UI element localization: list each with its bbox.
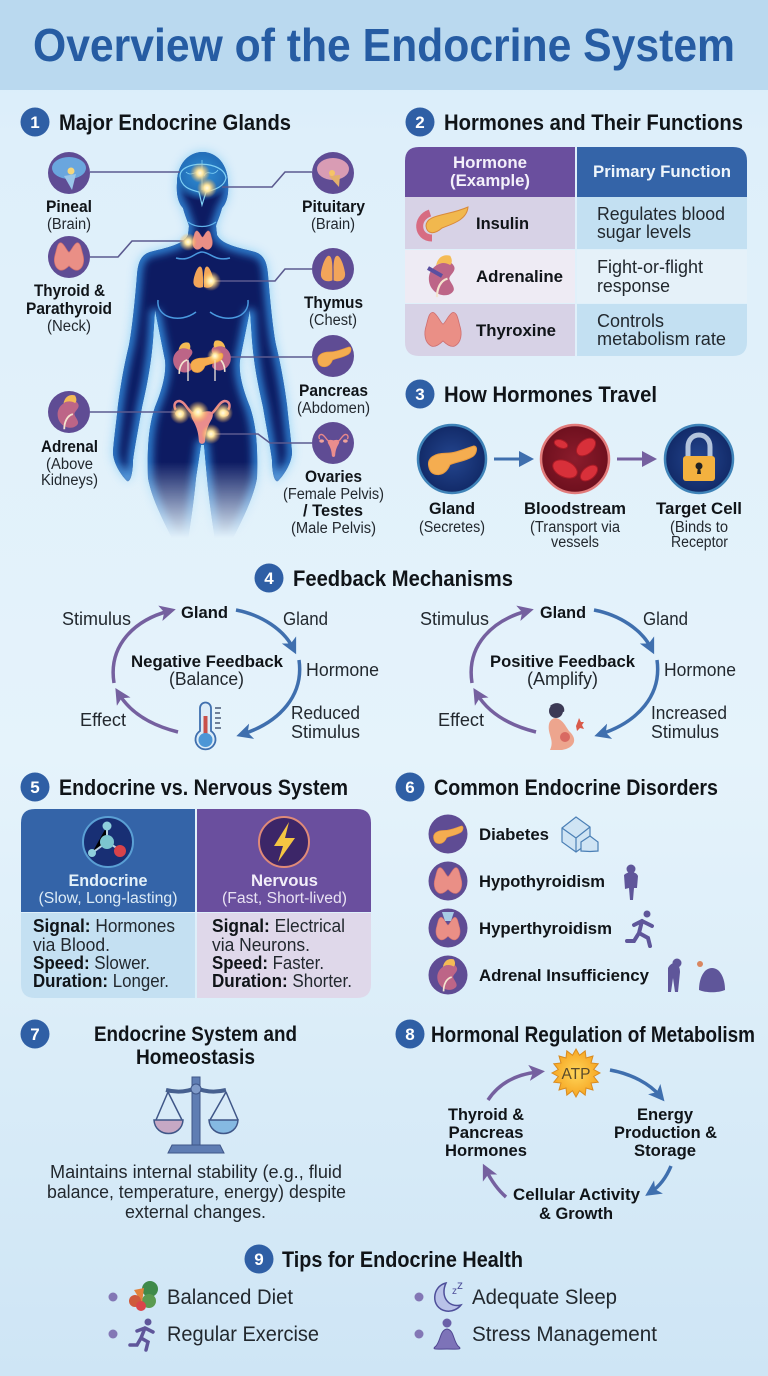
column: endocrine: Speed: Slower. [33, 953, 150, 973]
gland: pituitary: (Brain) [311, 216, 355, 233]
negative feedback loop: Gland [283, 609, 328, 629]
section heading 9: 9 [254, 1250, 264, 1269]
positive feedback loop [420, 604, 736, 750]
metabolism cycle: Hormones [445, 1142, 527, 1160]
gland: ovaries and testes: / Testes [303, 502, 363, 520]
icon: ATP burst: ATP [562, 1066, 590, 1083]
positive feedback loop: Gland [643, 609, 688, 629]
hormone table [405, 147, 747, 356]
section heading 4 [254, 564, 513, 592]
gland: adrenal: Adrenal [41, 438, 98, 456]
section heading 9: Tips for Endocrine Health [282, 1247, 523, 1272]
section heading 1 [20, 108, 291, 136]
tip: adequate sleep: z [457, 1278, 463, 1292]
icon: pregnant woman [549, 703, 584, 750]
tip: balanced diet: Balanced Diet [167, 1286, 293, 1309]
section heading 7: Homeostasis [136, 1046, 255, 1069]
gland: thyroid and parathyroid [26, 236, 112, 335]
section heading 4: 4 [264, 569, 274, 588]
metabolism cycle: Cellular Activity [513, 1186, 641, 1204]
section heading 4: Feedback Mechanisms [293, 566, 513, 591]
section heading 3 [406, 380, 657, 408]
hormone table: Primary Function [593, 163, 731, 181]
tip: stress management: Stress Management [472, 1323, 657, 1346]
panel: how hormones travel [406, 380, 742, 551]
section heading 7: Endocrine System and [94, 1023, 297, 1046]
gland: ovaries and testes: (Male Pelvis) [291, 520, 376, 537]
negative feedback loop: Hormone [306, 660, 379, 680]
column: endocrine: Signal: Hormones [33, 916, 175, 936]
step: bloodstream: (Transport via [530, 519, 620, 536]
metabolism cycle: Production & [614, 1124, 717, 1142]
positive feedback loop: Positive Feedback [490, 653, 636, 671]
disorder: adrenal insufficiency: Adrenal Insufficiency [479, 967, 650, 985]
disorder: hypothyroidism: Hypothyroidism [479, 873, 605, 891]
section heading 7 [20, 1020, 297, 1069]
title: Overview of the Endocrine System [33, 19, 735, 71]
positive feedback loop: Hormone [664, 660, 736, 680]
negative feedback loop: Reduced [291, 703, 360, 723]
column: nervous: Duration: Shorter. [212, 971, 352, 991]
gland: thyroid and parathyroid: Parathyroid [26, 300, 112, 318]
column: endocrine: Endocrine [68, 872, 148, 890]
row: insulin [420, 204, 725, 242]
tip: adequate sleep: z [452, 1286, 457, 1297]
section heading 6: 6 [405, 778, 415, 797]
gland: pineal [46, 152, 92, 233]
step: bloodstream: vessels [551, 534, 599, 551]
negative feedback loop [62, 604, 379, 749]
section heading 9 [244, 1244, 523, 1274]
tip: regular exercise: Regular Exercise [167, 1323, 319, 1346]
step: gland [418, 425, 486, 536]
gland: thymus: (Chest) [309, 312, 357, 329]
step: target cell: Receptor [671, 534, 728, 551]
column: nervous: via Neurons. [212, 935, 310, 955]
gland: pancreas: (Abdomen) [297, 400, 370, 417]
step: bloodstream: Bloodstream [524, 500, 626, 518]
row: adrenaline: Adrenaline [476, 268, 563, 286]
positive feedback loop: Gland [540, 604, 586, 622]
arrow: gland to bloodstream [494, 451, 534, 467]
step: target cell [656, 425, 742, 551]
section heading 8: 8 [405, 1025, 415, 1044]
positive feedback loop: (Amplify) [527, 669, 598, 689]
row: adrenaline: response [597, 276, 670, 296]
row: insulin: Insulin [476, 215, 529, 233]
icon: balance scales [154, 1077, 238, 1153]
section heading 6 [396, 772, 718, 802]
metabolism cycle: Storage [634, 1142, 696, 1160]
metabolism cycle: Thyroid & [448, 1106, 524, 1124]
hormone table: (Example) [450, 172, 530, 190]
gland: ovaries and testes: (Female Pelvis) [283, 486, 384, 503]
column: endocrine: (Slow, Long-lasting) [38, 890, 178, 907]
section heading 2: 2 [415, 113, 425, 132]
panel: homeostasis [20, 1020, 346, 1222]
gland: pituitary [302, 152, 366, 233]
body silhouette [113, 147, 292, 540]
gland: thymus: Thymus [304, 294, 363, 312]
gland: pituitary: Pituitary [302, 198, 366, 216]
panel: feedback mechanisms [62, 564, 736, 750]
section heading 3: 3 [415, 385, 425, 404]
icon: thermometer [196, 703, 221, 749]
step: bloodstream [524, 425, 626, 551]
section heading 5: 5 [30, 778, 40, 797]
gland: thyroid and parathyroid: Thyroid & [34, 282, 105, 300]
positive feedback loop: Increased [651, 703, 727, 723]
panel: hormonal regulation of metabolism [396, 1020, 755, 1223]
panel: endocrine vs nervous system [20, 772, 371, 998]
row: thyroxine: metabolism rate [597, 329, 726, 349]
negative feedback loop: Effect [80, 710, 126, 730]
metabolism cycle: & Growth [539, 1205, 613, 1223]
homeostasis description [47, 1162, 346, 1222]
row: adrenaline [428, 255, 703, 297]
disorder: hyperthyroidism: Hyperthyroidism [479, 920, 612, 938]
disorder: diabetes [428, 814, 598, 854]
column: endocrine: Duration: Longer. [33, 971, 169, 991]
column: nervous [197, 809, 371, 998]
gland: thyroid and parathyroid: (Neck) [47, 318, 91, 335]
section heading 2: Hormones and Their Functions [444, 110, 743, 135]
panel: hormones and their functions [405, 108, 747, 356]
metabolism cycle: Energy [637, 1106, 694, 1124]
panel: common endocrine disorders [396, 772, 725, 994]
metabolism cycle: Pancreas [448, 1124, 524, 1142]
tip: adequate sleep: Adequate Sleep [472, 1286, 617, 1309]
tip: balanced diet [108, 1281, 293, 1311]
column: nervous: Speed: Faster. [212, 953, 324, 973]
homeostasis description: balance, temperature, energy) despite [47, 1182, 346, 1202]
gland: thymus [304, 248, 363, 329]
gland: pineal: (Brain) [47, 216, 91, 233]
hormone table: Hormone [453, 154, 527, 172]
connector lines [90, 172, 312, 443]
arrow: bloodstream to target cell [617, 451, 657, 467]
panel: tips for endocrine health [108, 1244, 657, 1350]
gland: ovaries and testes: Ovaries [305, 468, 362, 486]
disorder: diabetes: Diabetes [479, 826, 549, 844]
gland: pineal: Pineal [46, 198, 92, 216]
negative feedback loop: Negative Feedback [131, 653, 284, 671]
row: thyroxine: Thyroxine [476, 322, 556, 340]
section heading 5: Endocrine vs. Nervous System [59, 775, 348, 800]
row: thyroxine [425, 311, 726, 349]
row: insulin: sugar levels [597, 222, 691, 242]
tip: regular exercise [108, 1318, 319, 1350]
positive feedback loop: Effect [438, 710, 484, 730]
homeostasis description: Maintains internal stability (e.g., fluid [50, 1162, 342, 1182]
row: insulin: Regulates blood [597, 204, 725, 224]
negative feedback loop: Gland [181, 604, 228, 622]
section heading 3: How Hormones Travel [444, 382, 657, 407]
section heading 6: Common Endocrine Disorders [434, 775, 718, 800]
panel: major endocrine glands [20, 108, 384, 540]
gland: pancreas: Pancreas [299, 382, 368, 400]
step: target cell: (Binds to [670, 519, 728, 536]
column: endocrine [21, 809, 195, 998]
step: gland: Gland [429, 500, 475, 518]
gland: pancreas [297, 335, 370, 417]
section heading 7: 7 [30, 1025, 40, 1044]
disorder: adrenal insufficiency [428, 956, 725, 994]
body organs with glow [170, 163, 233, 444]
gland: adrenal [41, 391, 98, 489]
disorder: hypothyroidism [428, 862, 638, 900]
positive feedback loop: Stimulus [420, 609, 489, 629]
icon: ATP burst [552, 1049, 600, 1097]
homeostasis description: external changes. [125, 1202, 266, 1222]
column: nervous: Signal: Electrical [212, 916, 345, 936]
section heading 1: 1 [30, 113, 40, 132]
tip: stress management [414, 1318, 657, 1349]
gland: ovaries and testes [283, 422, 384, 537]
section heading 5 [20, 772, 348, 802]
tip: adequate sleep [414, 1278, 617, 1311]
column: nervous: (Fast, Short-lived) [222, 890, 347, 907]
negative feedback loop: Stimulus [62, 609, 131, 629]
gland: adrenal: (Above [46, 456, 93, 473]
row: adrenaline: Fight-or-flight [597, 257, 703, 277]
row: thyroxine: Controls [597, 311, 664, 331]
section heading 1: Major Endocrine Glands [59, 110, 291, 135]
column: endocrine: via Blood. [33, 935, 110, 955]
gland: adrenal: Kidneys) [41, 472, 98, 489]
negative feedback loop: Stimulus [291, 722, 360, 742]
negative feedback loop: (Balance) [169, 669, 244, 689]
metabolism cycle [445, 1049, 717, 1223]
step: target cell: Target Cell [656, 500, 742, 518]
column: nervous: Nervous [251, 872, 318, 890]
step: gland: (Secretes) [419, 519, 485, 536]
positive feedback loop: Stimulus [651, 722, 719, 742]
disorder: hyperthyroidism [428, 908, 652, 948]
